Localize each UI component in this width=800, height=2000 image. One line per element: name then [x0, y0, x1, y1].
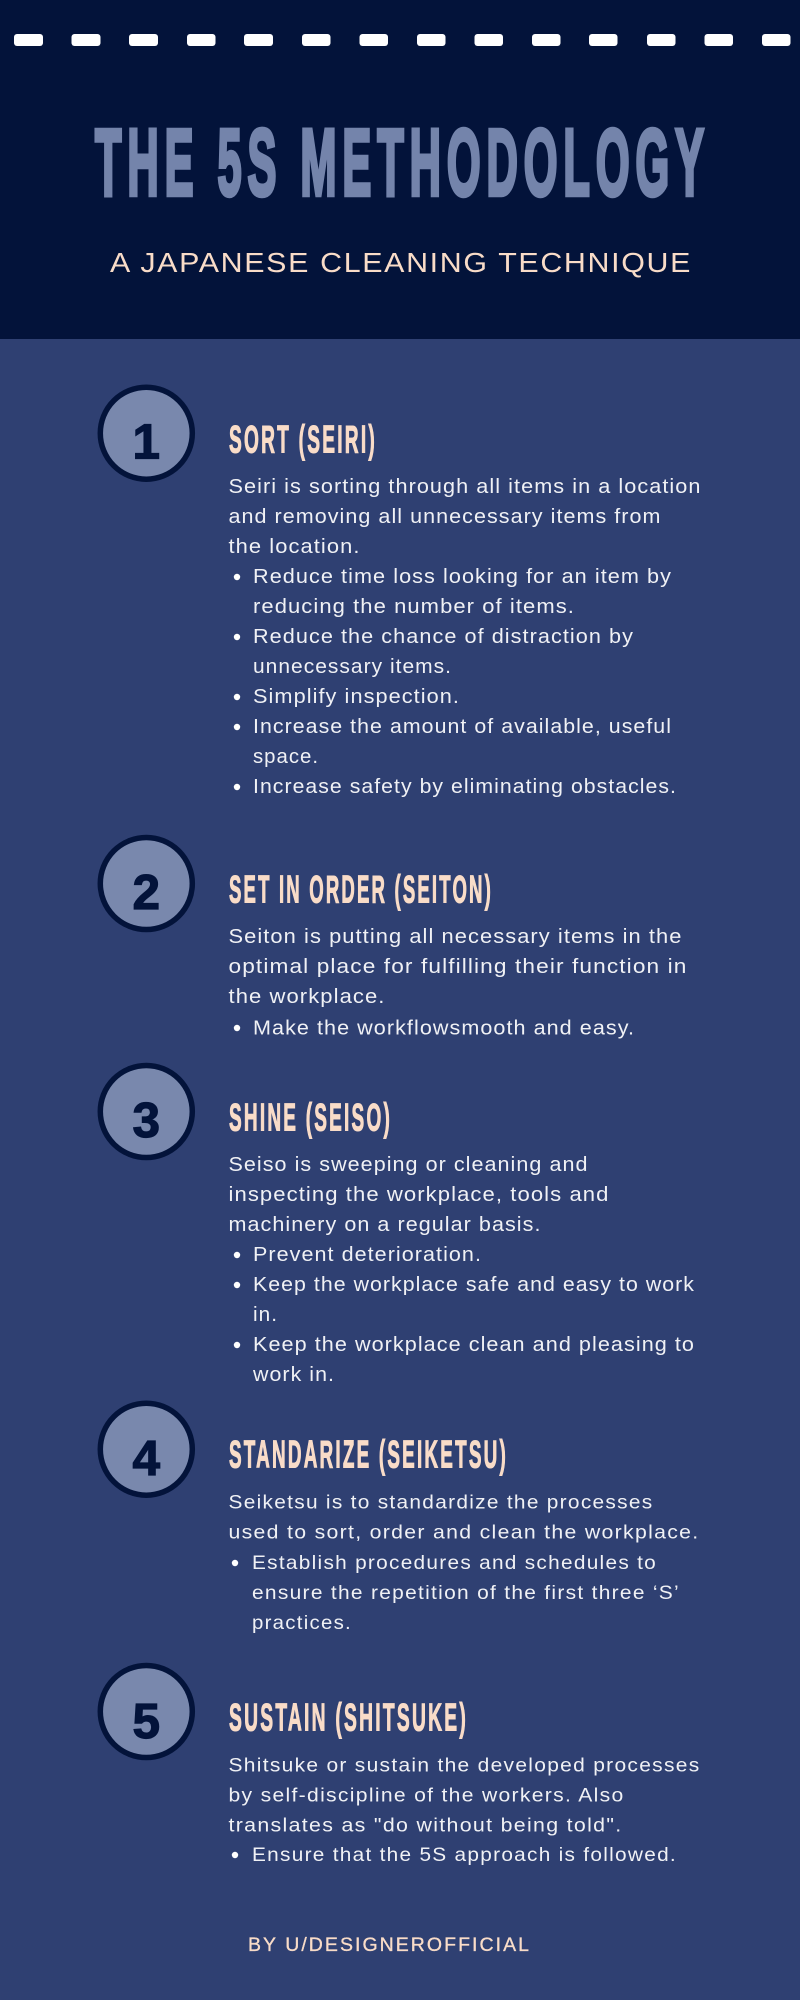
section 5: sustain: [100, 1666, 701, 1866]
badge 5: 5: [133, 1694, 160, 1749]
bullet list: shine: [234, 1243, 695, 1386]
bullet list: sort: [234, 565, 677, 798]
badge 5: [100, 1666, 192, 1758]
badge 1: [100, 387, 192, 479]
bullet list: sort: Reduce time loss looking for an item by: [253, 565, 672, 588]
bullet list: sort: reducing the number of items.: [253, 595, 575, 618]
description: shine: machinery on a regular basis.: [228, 1213, 542, 1236]
description: set in order: Seiton is putting all necessary items in the: [228, 925, 682, 948]
bullet list: shine: in.: [253, 1303, 278, 1326]
description: standarize: used to sort, order and clean the workplace.: [228, 1522, 700, 1544]
footer credit: BY U/DESIGNEROFFICIAL: [248, 1935, 531, 1956]
header panel: [0, 0, 800, 339]
section 5: sustain: SUSTAIN (SHITSUKE): [229, 1696, 468, 1740]
description: sort: Seiri is sorting through all items in a location: [228, 475, 702, 498]
badge 2: [100, 838, 192, 930]
description: set in order: the workplace.: [228, 985, 386, 1008]
bullet list: set in order: Make the workflowsmooth and easy.: [253, 1016, 635, 1040]
bullet list: sort: Reduce the chance of distraction by: [253, 625, 634, 648]
section 2: set in order: [100, 838, 688, 1040]
section 3: shine: [100, 1066, 695, 1386]
section 4: standarize: [100, 1403, 700, 1634]
section 4: standarize: STANDARIZE (SEIKETSU): [229, 1434, 508, 1476]
description: standarize: [228, 1492, 700, 1544]
badge 1: 1: [133, 414, 160, 470]
bullet list: shine: Keep the workplace clean and pleasing to: [253, 1333, 695, 1356]
bullet list: standarize: [232, 1552, 680, 1634]
description: sustain: by self-discipline of the workers. Also: [228, 1784, 624, 1806]
description: shine: [228, 1153, 610, 1236]
description: sustain: [228, 1754, 700, 1836]
bullet list: sustain: Ensure that the 5S approach is followed.: [252, 1844, 677, 1866]
description: sort: the location.: [228, 535, 360, 558]
bullet list: sort: Simplify inspection.: [253, 685, 460, 708]
bullet list: shine: work in.: [252, 1363, 335, 1386]
section 2: set in order: SET IN ORDER (SEITON): [229, 868, 493, 912]
description: set in order: [228, 925, 688, 1008]
badge 4: [100, 1403, 192, 1495]
subtitle: A JAPANESE CLEANING TECHNIQUE: [110, 247, 692, 278]
bullet list: standarize: Establish procedures and schedules to: [252, 1552, 657, 1574]
bullet list: sort: Increase the amount of available, useful: [253, 715, 672, 738]
description: shine: inspecting the workplace, tools and: [228, 1183, 610, 1206]
badge 3: [100, 1066, 192, 1158]
badge 3: 3: [133, 1093, 160, 1148]
bullet list: standarize: ensure the repetition of the first three ‘S’: [252, 1582, 680, 1604]
bullet list: shine: Keep the workplace safe and easy to work: [253, 1273, 695, 1296]
description: sort: [228, 475, 702, 558]
header background: [0, 0, 800, 339]
dashed white stitch line: [14, 34, 790, 46]
bullet list: shine: Prevent deterioration.: [253, 1243, 482, 1266]
description: sustain: Shitsuke or sustain the developed processes: [228, 1754, 700, 1776]
badge 4: 4: [133, 1431, 161, 1486]
section 3: shine: SHINE (SEISO): [229, 1096, 392, 1140]
description: shine: Seiso is sweeping or cleaning and: [228, 1153, 588, 1176]
description: standarize: Seiketsu is to standardize the processes: [228, 1492, 654, 1514]
section 1: sort: [100, 387, 702, 798]
bullet list: sort: unnecessary items.: [253, 655, 452, 678]
description: sort: and removing all unnecessary items from: [228, 505, 662, 528]
bullet list: standarize: practices.: [252, 1612, 352, 1634]
badge 2: 2: [133, 865, 160, 920]
section 1: sort: SORT (SEIRI): [229, 418, 377, 462]
description: sustain: translates as "do without being told".: [228, 1814, 622, 1836]
description: set in order: optimal place for fulfilling their function in: [228, 955, 688, 978]
bullet list: sort: Increase safety by eliminating obstacles.: [253, 775, 677, 798]
bullet list: sort: space.: [253, 745, 319, 768]
